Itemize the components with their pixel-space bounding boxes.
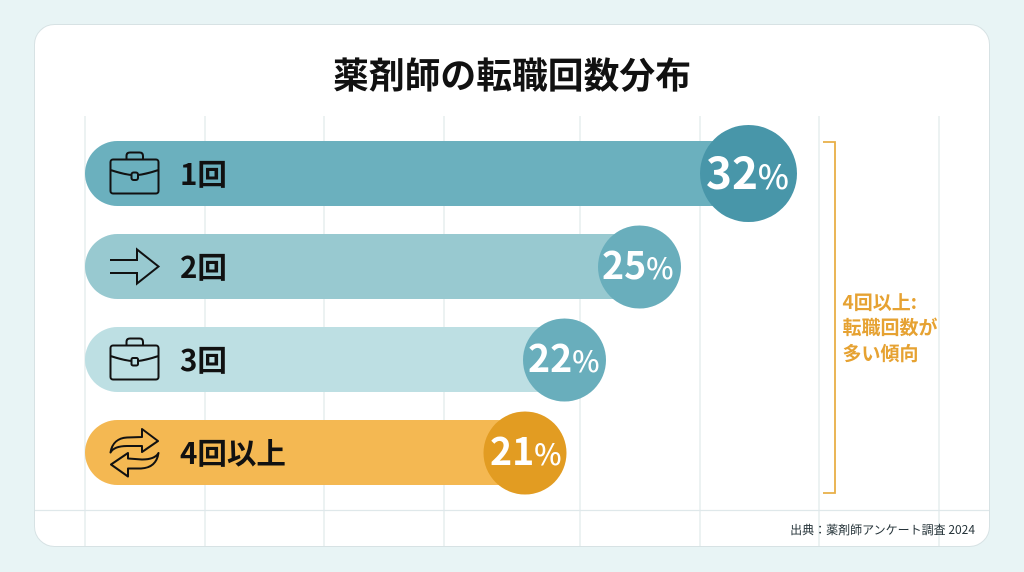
bar: 2回 25% [85,226,681,308]
label: 3回 [180,338,227,380]
icon: exchange arrows [110,429,158,476]
value: 21% [490,421,561,476]
value: 32% [706,138,789,202]
callout: 4回以上: [842,288,917,315]
title: 薬剤師の転職回数分布 [333,47,691,99]
bar: 4回以上 21% [85,412,566,494]
bar: 1回 32% [85,125,797,222]
icon: briefcase [110,338,158,380]
bracket [823,142,835,493]
value: 22% [528,328,599,383]
label: 2回 [180,245,227,287]
bar: 3回 22% [85,318,606,402]
callout: 転職回数が [842,313,938,340]
icon: briefcase [110,152,158,194]
label: 1回 [180,152,227,194]
value: 25% [602,235,673,290]
source note: 出典：薬剤師アンケート調査 2024 [790,521,975,538]
callout: 多い傾向 [842,339,919,366]
label: 4回以上 [180,431,286,473]
icon: arrow [110,250,158,284]
